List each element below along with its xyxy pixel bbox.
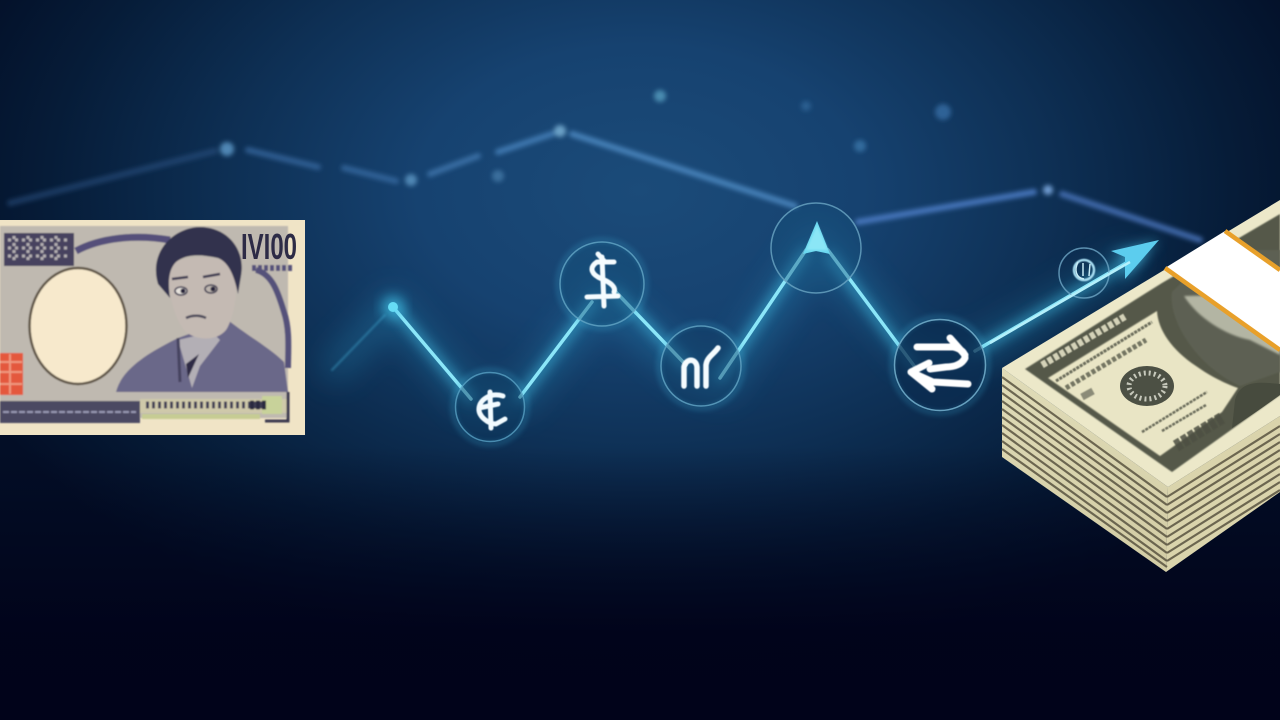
portrait eyes and mouth (172, 274, 220, 279)
icon: exchange arrows node (892, 317, 988, 413)
icon: dollar-like currency node (558, 240, 646, 328)
portrait hair (156, 227, 242, 298)
portrait face (188, 319, 230, 338)
portrait shading (1172, 250, 1280, 428)
top left ornament (4, 233, 74, 266)
portrait coat (116, 320, 288, 392)
start point node (381, 295, 405, 319)
paper strap (1165, 231, 1280, 350)
red seal (0, 353, 23, 395)
dollar banknote stack (1002, 200, 1280, 572)
treasury seal (1120, 366, 1174, 406)
stack right side (1166, 416, 1280, 572)
arrow head (990, 239, 1160, 343)
stack left side (1002, 368, 1168, 572)
top note paper (1002, 200, 1280, 487)
right ornament (256, 270, 288, 368)
printed lines on note (1042, 316, 1222, 446)
yen banknote (0, 220, 305, 435)
top arch ornament (76, 237, 170, 251)
icon: peak arrow node (771, 203, 861, 293)
glowing trend line (332, 244, 1140, 399)
page lines left (1002, 377, 1167, 567)
note value text: IVI00 (241, 228, 297, 267)
note engraved border (1025, 214, 1280, 472)
oval watermark window (30, 268, 126, 384)
icon: small coin node (1059, 248, 1109, 298)
faint background trend line (10, 90, 1200, 240)
lower left serial band (0, 401, 140, 423)
strap orange bands (1165, 268, 1280, 350)
icon: bars node (659, 324, 743, 408)
note light panel (1048, 311, 1238, 456)
page lines right (1167, 426, 1280, 561)
lower right band (140, 399, 288, 413)
note face (0, 226, 288, 418)
icon: euro-like currency node (453, 370, 527, 444)
